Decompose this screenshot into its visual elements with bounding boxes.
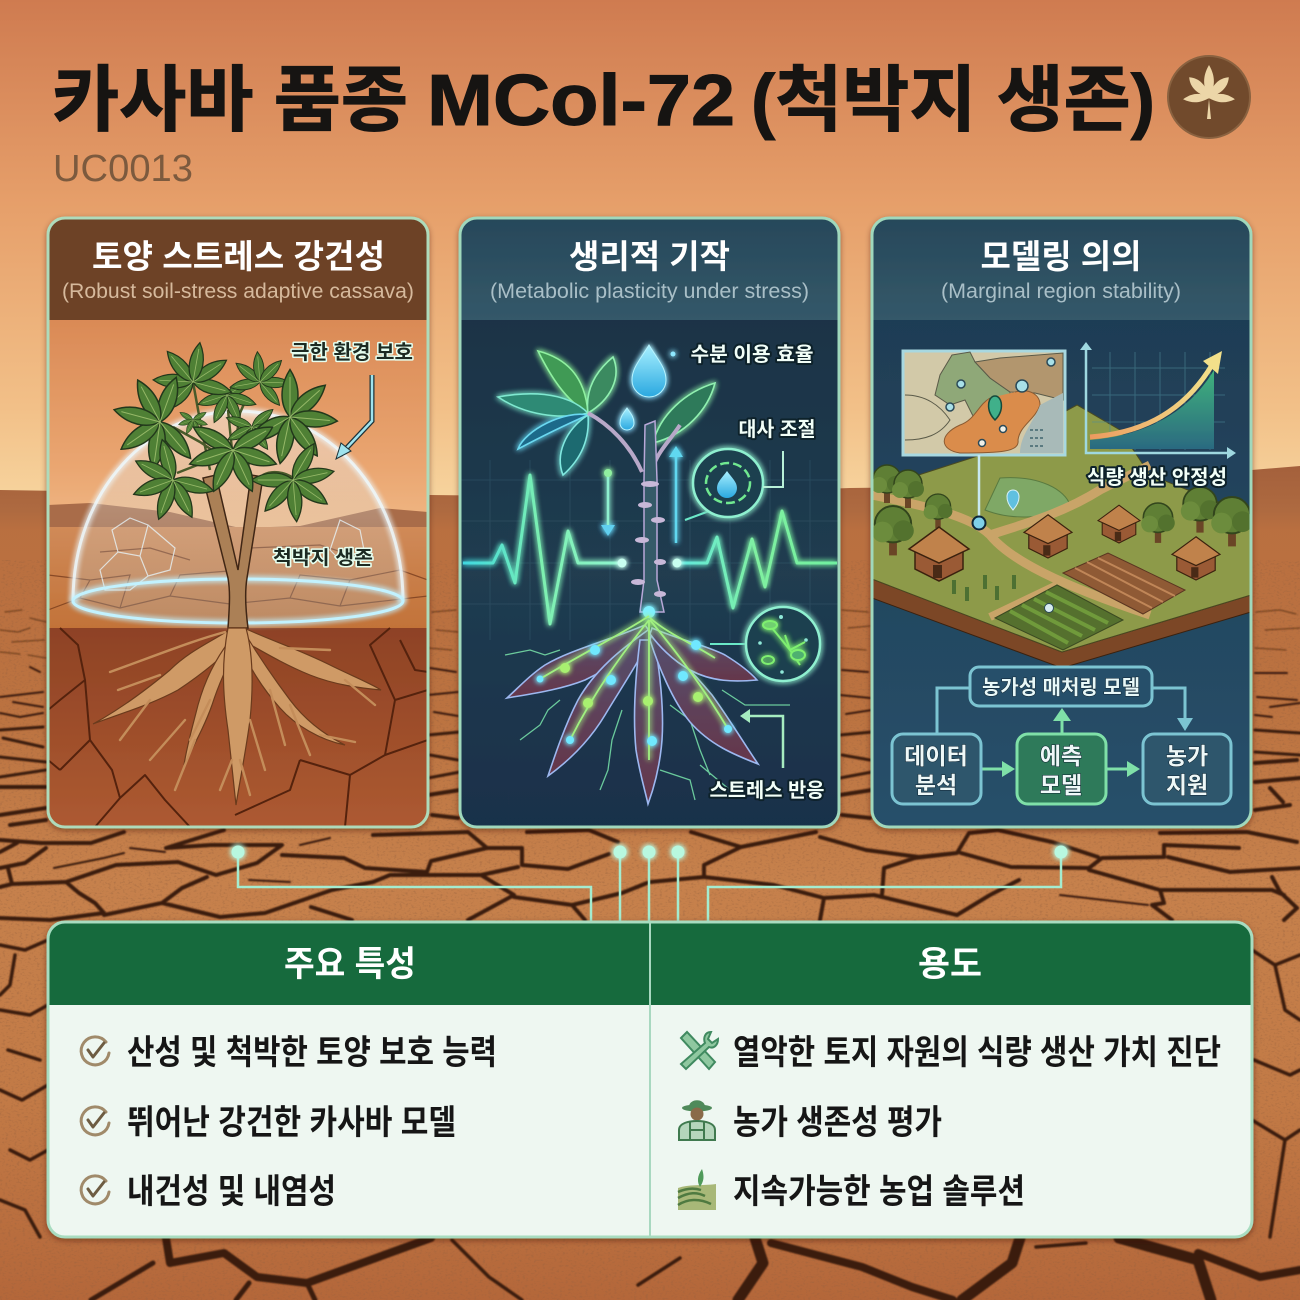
table fills (48, 922, 1252, 1237)
up arrow (669, 446, 683, 543)
stability chart (1080, 342, 1236, 459)
arrow: data to model (982, 761, 1015, 777)
label: stress response: 스트레스 반응 (710, 779, 824, 802)
neon stem (588, 413, 680, 620)
band cracks (0, 830, 1300, 920)
cassava leaves (112, 342, 339, 523)
protective dome (73, 411, 403, 624)
label: extreme environment protection: 극한 환경 보호 (291, 341, 413, 364)
arrow: to dome (336, 375, 372, 459)
metabolic cell callout (685, 449, 783, 520)
arrowhead into farm support (1177, 718, 1193, 731)
side cracks (0, 940, 1300, 1237)
brown furrow field (1063, 553, 1185, 614)
crops patch (952, 575, 1016, 601)
flow connectors (937, 688, 1185, 733)
flow box: farm support: 농가 (1166, 743, 1208, 769)
use 1: 열악한 토지 자원의 식량 생산 가치 진단 (733, 1034, 1221, 1072)
panel: soil stress robustness (48, 218, 428, 827)
trait 1: 산성 및 척박한 토양 보호 능력 (127, 1034, 497, 1072)
arrow: stress response (740, 709, 783, 768)
icon: tools (681, 1032, 718, 1069)
microbe callout (710, 607, 820, 681)
sub heading: mechanism: (Metabolic plasticity under stress) (490, 280, 809, 303)
neon leaves (498, 351, 715, 475)
flow box: prediction model (1017, 734, 1106, 804)
background: cracked desert ground (0, 466, 1300, 1300)
bottom cracks (166, 1238, 1300, 1300)
trait 3: 내건성 및 내염성 (127, 1173, 336, 1211)
flow box: farm matching model: 농가성 매처링 모델 (982, 676, 1140, 699)
cassava stems (173, 382, 293, 478)
map pin connector (972, 455, 1019, 530)
icon: farmer (679, 1100, 715, 1140)
flow box: data analysis: 데이터 (904, 743, 968, 769)
title (52, 61, 1155, 141)
heading: soil stress: 토양 스트레스 강건성 (92, 238, 385, 275)
panel: physiological mechanism (460, 218, 839, 827)
double arrow (601, 469, 615, 536)
neon tubers (507, 625, 758, 804)
panel 3 content (871, 218, 1253, 827)
heading: uses: 용도 (918, 945, 982, 984)
use 2: 농가 생존성 평가 (733, 1104, 942, 1142)
heading: mechanism: 생리적 기작 (569, 238, 730, 275)
panel 2 content (460, 218, 839, 827)
subtitle code: UC0013 (53, 148, 193, 190)
map inset (903, 351, 1065, 455)
trait 2: 뛰어난 강건한 카사바 모델 (127, 1104, 456, 1142)
label: marginal land survival: 척박지 생존 (273, 547, 373, 569)
water drops (620, 345, 676, 430)
cassava roots (93, 628, 381, 805)
flow box: data analysis: 분석 (915, 772, 957, 798)
panel: modeling significance (871, 218, 1253, 827)
green crop field (995, 585, 1123, 650)
icon: sprout field (678, 1169, 716, 1210)
background: sunset sky (0, 0, 1300, 510)
title: (척박지 생존) (751, 61, 1155, 141)
ECG end nodes (618, 558, 682, 568)
title: MCol-72 (427, 61, 735, 141)
connectors from panels to table (232, 846, 1068, 923)
panel 1 content (48, 218, 428, 827)
flow box: prediction model: 모델 (1040, 772, 1082, 798)
panel: key traits and uses table (48, 922, 1252, 1237)
thin feeder roots (505, 650, 790, 800)
sub heading: modeling: (Marginal region stability) (941, 280, 1181, 303)
arrow: model to support (1107, 761, 1140, 777)
use 3: 지속가능한 농업 솔루션 (733, 1173, 1025, 1211)
ECG line (463, 475, 837, 624)
cassava trunk and branches (203, 475, 263, 628)
flow box: prediction model: 에측 (1040, 743, 1082, 769)
title: 카사바 품종 (52, 61, 408, 141)
label: food production stability: 식량 생산 안정성 (1087, 466, 1227, 489)
flow box: farm support (1143, 734, 1231, 804)
arrow: up to matching model (1053, 708, 1071, 733)
far horizontal cracks (0, 610, 1300, 658)
label: metabolic regulation: 대사 조절 (738, 418, 816, 441)
trees (871, 465, 1253, 555)
heading: modeling: 모델링 의의 (980, 238, 1142, 275)
flow box: farm matching model (970, 667, 1152, 706)
flow box: farm support: 지원 (1166, 772, 1208, 798)
neon veins and nodes (536, 616, 732, 760)
heading: key traits: 주요 특성 (284, 945, 416, 984)
icon: cassava leaf badge (1168, 56, 1250, 138)
houses (909, 505, 1220, 581)
sub heading: soil stress: (Robust soil-stress adaptive cassava) (62, 280, 414, 303)
label: water use efficiency: 수분 이용 효율 (690, 343, 814, 366)
land block (872, 405, 1251, 668)
flow box: data analysis (892, 734, 981, 804)
